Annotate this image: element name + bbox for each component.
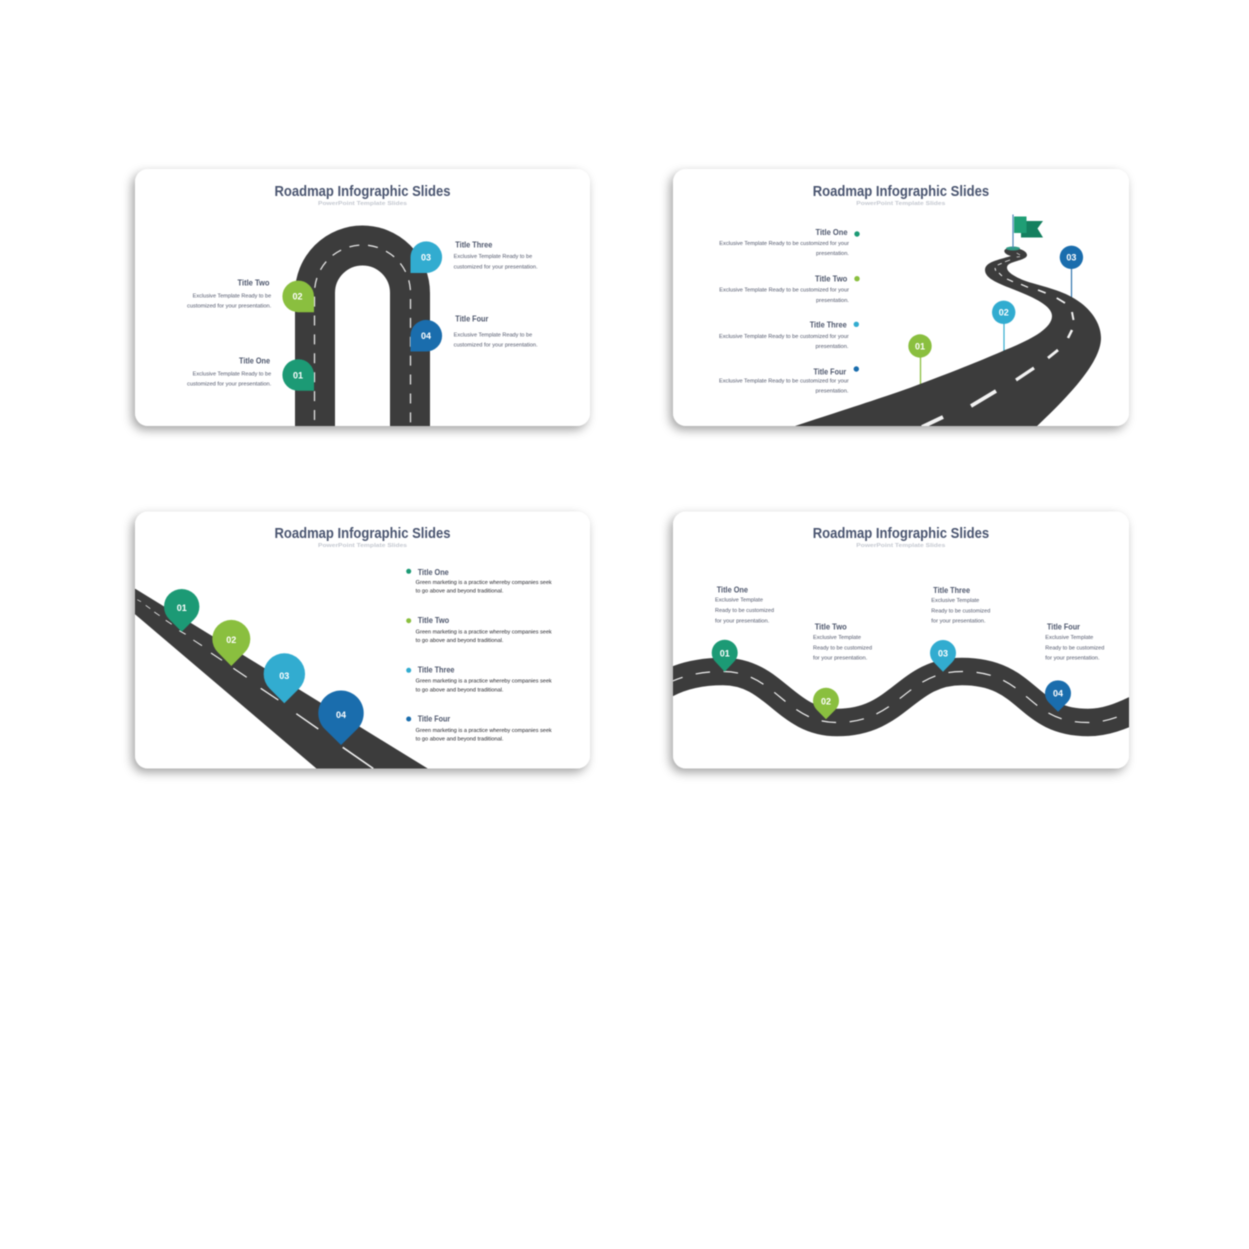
title: Roadmap Infographic Slides (274, 183, 450, 200)
text: title two: Title Two (418, 615, 449, 625)
pin 01: 01 (177, 603, 187, 613)
text: title four: Title Four (814, 366, 847, 376)
pin 03: 03 (421, 252, 431, 262)
text: title one: Title One (816, 227, 848, 237)
hairpin road (314, 245, 410, 430)
text: title one (406, 567, 552, 595)
text: title four: Title Four (1047, 622, 1081, 632)
text: title one: Title One (717, 584, 748, 594)
winding road (795, 248, 1101, 428)
title: Roadmap Infographic Slides (813, 525, 989, 542)
text: title two: to go above and beyond traditional. (416, 638, 503, 644)
text: title two: Ready to be customized (813, 645, 872, 651)
pin 03 (264, 653, 305, 703)
text: title one (719, 227, 860, 257)
pin 01: 01 (720, 648, 730, 658)
text: title two: Exclusive Template Ready to be customized for your (719, 288, 849, 294)
pin 03: 03 (279, 671, 289, 681)
title: Roadmap Infographic Slides (813, 183, 989, 200)
text: title four: Title Four (455, 313, 489, 323)
text: title three: to go above and beyond traditional. (416, 687, 503, 693)
text: title four: Green marketing is a practice whereby companies seek (416, 728, 552, 734)
text: title one: presentation. (816, 251, 849, 257)
pin 03 (410, 241, 442, 273)
pin 04 (318, 690, 364, 745)
text: title three (454, 239, 538, 270)
pin 02: 02 (226, 635, 236, 645)
text: title three: Green marketing is a practice whereby companies seek (416, 679, 552, 685)
text: title four: Exclusive Template (1045, 635, 1093, 641)
text: title one: Ready to be customized (715, 608, 774, 614)
text: title three (719, 320, 859, 350)
pin 01 (712, 640, 738, 672)
text: title two: Exclusive Template Ready to be (193, 293, 271, 299)
pin 01 (908, 334, 932, 358)
text: title one: to go above and beyond traditional. (416, 589, 503, 595)
text: title one (715, 584, 774, 624)
pin 02: 02 (999, 308, 1009, 318)
pin 01: 01 (915, 341, 925, 351)
text: title two: Title Two (815, 274, 847, 284)
text: title four (406, 714, 552, 743)
text: title two: Title Two (815, 622, 847, 632)
pin 04: 04 (421, 331, 431, 341)
panel: wavy road slide (663, 512, 1140, 768)
pin 04: 04 (1053, 688, 1063, 698)
text: title four: to go above and beyond traditional. (416, 737, 503, 743)
text: title three: for your presentation. (931, 619, 986, 625)
text: title one: customized for your presentation. (187, 382, 271, 388)
pin 02: 02 (292, 292, 303, 302)
pin 04: 04 (336, 710, 346, 720)
pin 03 (930, 640, 956, 672)
text: title four: Exclusive Template Ready to be (454, 332, 532, 338)
text: title four: for your presentation. (1045, 656, 1100, 662)
text: title three: Ready to be customized (931, 608, 990, 614)
text: title three: Title Three (810, 320, 847, 330)
text: title two: Green marketing is a practice whereby companies seek (416, 629, 552, 635)
pin 03 (1060, 246, 1083, 269)
stem 01 (920, 350, 922, 386)
diagonal road (130, 586, 428, 769)
pin 03: 03 (1066, 253, 1076, 263)
pin 04 (1045, 680, 1071, 712)
text: title two (187, 277, 271, 310)
pin 01 (164, 589, 199, 632)
text: title two (813, 622, 872, 662)
text: title three: Exclusive Template Ready to be customized for your (719, 334, 849, 340)
icon: flag (1006, 214, 1043, 250)
stem 03 (1070, 262, 1072, 298)
text: title one: Exclusive Template Ready to be (193, 371, 271, 377)
text: title two: customized for your presentation. (187, 304, 271, 310)
text: title one: Exclusive Template Ready to be customized for your (719, 241, 849, 247)
text: title four: Ready to be customized (1045, 645, 1104, 651)
text: title three: customized for your presentation. (454, 264, 538, 270)
text: title two (719, 274, 860, 304)
text: title three: Exclusive Template Ready to be (454, 254, 532, 260)
subtitle: PowerPoint Template Slides (318, 543, 407, 549)
text: title one: Title One (239, 356, 270, 366)
text: title two (406, 615, 552, 644)
text: title three (406, 664, 552, 693)
text: title four: customized for your presentation. (454, 343, 538, 349)
pin 02 (282, 281, 314, 312)
text: title four (719, 366, 859, 394)
text: title three: presentation. (816, 344, 848, 350)
pin 04 (410, 320, 442, 352)
pin 02 (212, 620, 250, 666)
subtitle: PowerPoint Template Slides (318, 201, 407, 207)
subtitle: PowerPoint Template Slides (856, 543, 945, 549)
subtitle: PowerPoint Template Slides (856, 201, 945, 207)
text: title four: presentation. (816, 388, 848, 394)
text: title one: Exclusive Template (715, 598, 763, 604)
text: title three: Title Three (455, 239, 493, 249)
text: title one: Title One (418, 567, 449, 577)
panel: winding road with flag slide (673, 169, 1129, 428)
text: title two: Exclusive Template (813, 635, 861, 641)
stem 02 (1003, 318, 1005, 351)
text: title one (187, 356, 271, 388)
panel: diagonal road slide (130, 512, 590, 769)
text: title two: Title Two (238, 277, 270, 287)
wavy road (663, 672, 1140, 722)
text: title four (454, 313, 538, 349)
pin 01 (282, 359, 314, 391)
pin 02: 02 (821, 696, 831, 706)
pin 01: 01 (293, 370, 303, 380)
panel: hairpin roadmap slide (135, 169, 590, 430)
text: title three: Exclusive Template (931, 598, 979, 604)
text: title four: Title Four (418, 714, 451, 724)
text: title one: Green marketing is a practice whereby companies seek (416, 580, 552, 586)
pin 02 (813, 688, 839, 719)
text: title four (1045, 622, 1104, 662)
title: Roadmap Infographic Slides (274, 525, 450, 542)
pin 03: 03 (938, 649, 948, 659)
text: title three: Title Three (418, 664, 455, 674)
text: title four: Exclusive Template Ready to be customized for your (719, 378, 849, 384)
text: title two: for your presentation. (813, 656, 867, 662)
text: title three: Title Three (933, 585, 970, 595)
text: title three (931, 585, 990, 625)
text: title one: for your presentation. (715, 618, 769, 624)
text: title two: presentation. (816, 298, 849, 304)
pin 02 (992, 301, 1015, 324)
